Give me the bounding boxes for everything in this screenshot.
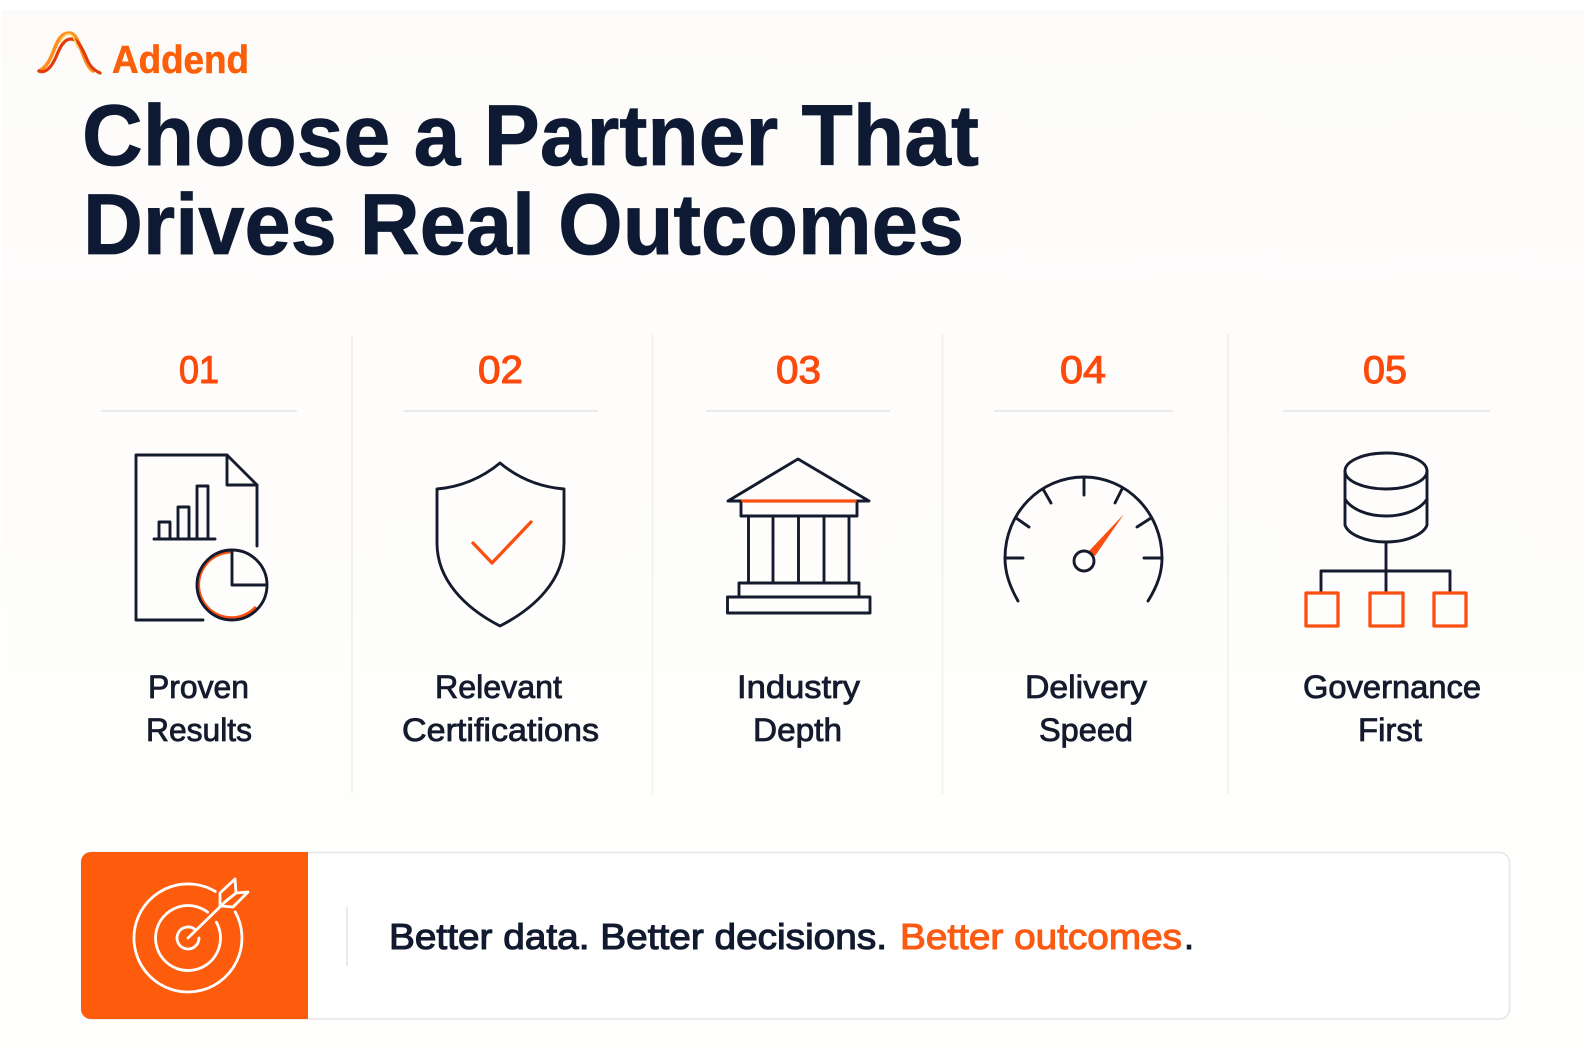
panel: 05 Governance First <box>1283 349 1490 748</box>
icon: institution building <box>728 459 870 613</box>
icon: speedometer <box>1005 477 1162 601</box>
logo: Addend <box>39 33 249 82</box>
message text <box>389 916 1194 957</box>
label: Relevant <box>435 669 562 705</box>
label <box>737 669 860 748</box>
label: Certifications <box>402 712 599 748</box>
message text: . <box>1184 916 1194 957</box>
title <box>82 88 979 273</box>
label: Proven <box>148 669 249 705</box>
label <box>1303 669 1481 748</box>
panel: 02 Relevant Certifications <box>402 349 599 748</box>
label <box>1025 669 1147 748</box>
label: First <box>1358 712 1422 748</box>
message text: Better outcomes <box>900 916 1182 957</box>
logo wordmark: Addend <box>112 39 249 82</box>
panel: 04 Delivery Speed <box>994 349 1173 748</box>
label: Speed <box>1039 712 1133 748</box>
label: Industry <box>737 669 860 705</box>
label: Governance <box>1303 669 1481 705</box>
icon: report with charts <box>136 455 267 620</box>
label: Results <box>146 712 252 748</box>
icon: target with arrow <box>134 879 248 992</box>
panel: 03 Industry Depth <box>706 349 890 748</box>
number 02: 02 <box>478 349 523 392</box>
icon: shield with check <box>437 463 564 626</box>
label: Depth <box>753 712 842 748</box>
label <box>402 669 599 748</box>
message text: Better data. Better decisions. <box>389 916 887 957</box>
orange icon block <box>81 852 308 1019</box>
number 01: 01 <box>179 349 219 392</box>
title: Drives Real Outcomes <box>83 177 964 273</box>
title: Choose a Partner That <box>82 88 979 184</box>
number 03: 03 <box>776 349 821 392</box>
number 05: 05 <box>1363 349 1407 392</box>
number 04: 04 <box>1060 349 1106 392</box>
icon: logo swoosh <box>39 33 100 73</box>
label: Delivery <box>1025 669 1147 705</box>
callout: bottom message bar <box>81 852 1510 1019</box>
panel: 01 Proven Results <box>101 349 297 748</box>
icon: database hierarchy <box>1306 453 1466 626</box>
label <box>146 669 252 748</box>
